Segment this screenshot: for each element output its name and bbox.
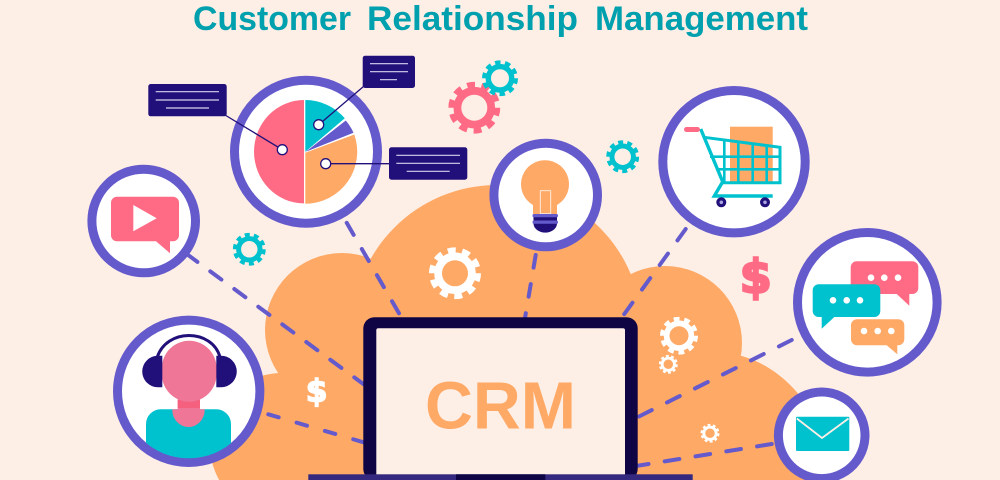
callout box: top [363, 56, 415, 88]
title [193, 0, 808, 38]
gear: white small lower [702, 425, 718, 442]
panel: email [774, 387, 869, 480]
icon: play triangle [133, 205, 157, 231]
icon: cart handle [684, 127, 700, 132]
headset band [157, 336, 220, 357]
icon: envelope [796, 417, 849, 451]
dollar sign: pink: $ [740, 250, 772, 304]
pie slice: teal [305, 100, 345, 152]
CRM label: CRM [425, 368, 576, 443]
icon: orange bubble [851, 319, 904, 354]
panel: shopping cart [663, 90, 805, 233]
dollar sign: white: $ [306, 374, 327, 410]
icon: cart [701, 129, 780, 196]
callout box: right [389, 147, 467, 180]
gear: white small [660, 356, 677, 373]
gear: teal top [484, 63, 516, 94]
callout leaders [225, 86, 390, 164]
pie slice: purple [306, 120, 354, 152]
panel: light bulb [494, 143, 598, 247]
title: Relationship [367, 0, 578, 38]
gear: white large [432, 251, 478, 296]
icon: bulb base [532, 214, 558, 233]
agent neck [172, 398, 205, 427]
icon: envelope flap [797, 418, 848, 438]
title: Customer [193, 0, 351, 38]
gear: teal right [608, 142, 637, 171]
agent head [162, 341, 217, 402]
icon: wheels [716, 197, 770, 207]
panel: video [92, 169, 196, 273]
headset earpiece: left [142, 356, 162, 387]
callout dots [277, 120, 331, 169]
pie slice: orange [305, 134, 357, 204]
dashed connectors [186, 223, 792, 466]
laptop [308, 317, 693, 480]
agent torso [146, 409, 231, 458]
gear: pink [452, 85, 497, 130]
icon: pink bubble [851, 261, 918, 306]
laptop screen [376, 328, 625, 476]
laptop base [308, 474, 693, 480]
icon: filament [540, 191, 551, 214]
headset earpiece: right [216, 356, 237, 387]
panel: support agent [118, 320, 260, 470]
title: Management [595, 0, 808, 38]
panel: pie chart [148, 56, 467, 223]
gear: teal left [235, 235, 264, 264]
icon: teal bubble [813, 284, 880, 329]
pie slice: pink [254, 100, 304, 203]
icon: box [730, 127, 773, 183]
gear: white medium [662, 319, 696, 352]
panel: chat [798, 232, 937, 372]
icon: video bubble [111, 197, 179, 253]
callout box: left [148, 84, 227, 116]
cloud [210, 185, 815, 480]
icon: bulb [521, 160, 569, 215]
icon: bubble dots [830, 274, 901, 334]
neck shadow [178, 400, 200, 408]
